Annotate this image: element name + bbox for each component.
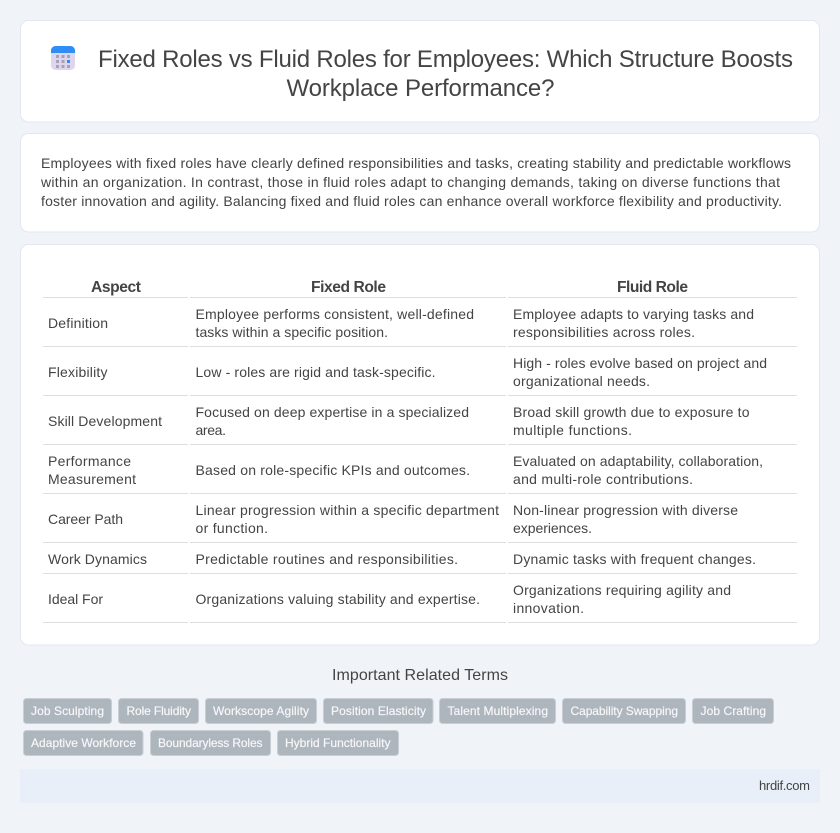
row: Skill Development bbox=[43, 404, 797, 445]
row: Skill Development: Broad skill growth due to exposure to bbox=[513, 404, 750, 420]
row: Work Dynamics: Dynamic tasks with frequent changes. bbox=[513, 551, 756, 567]
row: Flexibility bbox=[43, 355, 797, 396]
tag: Position Elasticity bbox=[324, 698, 433, 724]
related term tags bbox=[24, 698, 774, 756]
row: Flexibility: Low - roles are rigid and task-specific. bbox=[196, 364, 436, 380]
row: Ideal For: Organizations valuing stability and expertise. bbox=[196, 591, 480, 607]
tag: Boundaryless Roles bbox=[150, 730, 270, 756]
table header row: Fluid Role bbox=[617, 279, 688, 296]
icon: calendar bbox=[51, 46, 75, 70]
row: Performance Measurement: and multi-role contributions. bbox=[513, 471, 693, 487]
tag: Job Crafting: Job Crafting bbox=[700, 704, 766, 718]
intro paragraph: foster innovation and agility. Balancing fixed and fluid roles can enhance overall workforce flexibility and productivity. bbox=[41, 193, 782, 209]
panel: header bbox=[20, 20, 820, 122]
row: Ideal For: innovation. bbox=[513, 600, 584, 616]
row: Work Dynamics: Work Dynamics bbox=[48, 551, 147, 567]
footer: hrdif.com bbox=[759, 778, 810, 793]
tag: Job Sculpting bbox=[24, 698, 112, 724]
tag: Capability Swapping: Capability Swapping bbox=[570, 704, 678, 718]
title bbox=[98, 46, 793, 102]
row: Work Dynamics: Predictable routines and responsibilities. bbox=[196, 551, 458, 567]
row: Career Path: experiences. bbox=[513, 520, 592, 536]
row: Definition: Employee performs consistent, well-defined bbox=[196, 306, 474, 322]
panel: comparison table bbox=[20, 244, 820, 645]
tag: Talent Multiplexing: Talent Multiplexing bbox=[448, 704, 548, 718]
row: Career Path: Non-linear progression with diverse bbox=[513, 502, 738, 518]
table header row bbox=[43, 279, 797, 298]
table header row: Aspect bbox=[91, 279, 141, 296]
title: Fixed Roles vs Fluid Roles for Employees: Which Structure Boosts bbox=[98, 46, 793, 73]
table header row: Fixed Role bbox=[311, 279, 386, 296]
tag: Workscope Agility: Workscope Agility bbox=[213, 704, 309, 718]
row: Definition: responsibilities across roles. bbox=[513, 324, 695, 340]
row: Ideal For: Organizations requiring agility and bbox=[513, 582, 731, 598]
tag: Capability Swapping bbox=[562, 698, 686, 724]
row: Skill Development: multiple functions. bbox=[513, 422, 632, 438]
row: Flexibility: organizational needs. bbox=[513, 373, 650, 389]
row: Ideal For bbox=[43, 582, 797, 623]
row: Performance Measurement: Performance bbox=[48, 453, 131, 469]
tag: Job Sculpting: Job Sculpting bbox=[31, 704, 104, 718]
intro paragraph: Employees with fixed roles have clearly defined responsibilities and tasks, creating stability and predictable workflows bbox=[41, 155, 791, 171]
tag: Hybrid Functionality: Hybrid Functionality bbox=[285, 736, 390, 750]
row: Definition: tasks within a specific position. bbox=[196, 324, 388, 340]
row: Performance Measurement: Evaluated on adaptability, collaboration, bbox=[513, 453, 763, 469]
tag: Job Crafting bbox=[692, 698, 774, 724]
tag: Boundaryless Roles: Boundaryless Roles bbox=[158, 736, 262, 750]
tag: Adaptive Workforce: Adaptive Workforce bbox=[31, 736, 136, 750]
tag: Hybrid Functionality bbox=[278, 730, 398, 756]
intro paragraph bbox=[40, 155, 791, 209]
footer bbox=[20, 769, 820, 803]
row: Career Path: Career Path bbox=[48, 511, 123, 527]
row: Skill Development: area. bbox=[196, 422, 226, 438]
panel: intro text bbox=[20, 134, 820, 232]
row: Skill Development: Skill Development bbox=[48, 413, 162, 429]
intro paragraph: within an organization. In contrast, those in fluid roles adapt to changing demands, taking on diverse functions that bbox=[40, 174, 780, 190]
tag: Role Fluidity bbox=[118, 698, 198, 724]
row: Career Path: or function. bbox=[196, 520, 268, 536]
row: Ideal For: Ideal For bbox=[48, 591, 103, 607]
tag: Role Fluidity: Role Fluidity bbox=[126, 704, 191, 718]
row: Skill Development: Focused on deep expertise in a specialized bbox=[196, 404, 469, 420]
row: Career Path: Linear progression within a specific department bbox=[196, 502, 499, 518]
row: Definition bbox=[43, 306, 797, 347]
row: Definition: Definition bbox=[48, 315, 108, 331]
row: Definition: Employee adapts to varying tasks and bbox=[513, 306, 754, 322]
tag: Workscope Agility bbox=[206, 698, 316, 724]
title: Workplace Performance? bbox=[286, 75, 554, 102]
tag: Position Elasticity: Position Elasticity bbox=[331, 704, 426, 718]
row: Performance Measurement bbox=[43, 453, 797, 494]
tag: Talent Multiplexing bbox=[440, 698, 556, 724]
heading: related terms: Important Related Terms bbox=[332, 667, 508, 684]
row: Flexibility: High - roles evolve based on project and bbox=[513, 355, 767, 371]
row: Performance Measurement: Measurement bbox=[48, 471, 136, 487]
row: Performance Measurement: Based on role-specific KPIs and outcomes. bbox=[196, 462, 470, 478]
tag: Adaptive Workforce bbox=[24, 730, 143, 756]
row: Career Path bbox=[43, 502, 797, 543]
row: Work Dynamics bbox=[43, 551, 797, 574]
row: Flexibility: Flexibility bbox=[48, 364, 108, 380]
